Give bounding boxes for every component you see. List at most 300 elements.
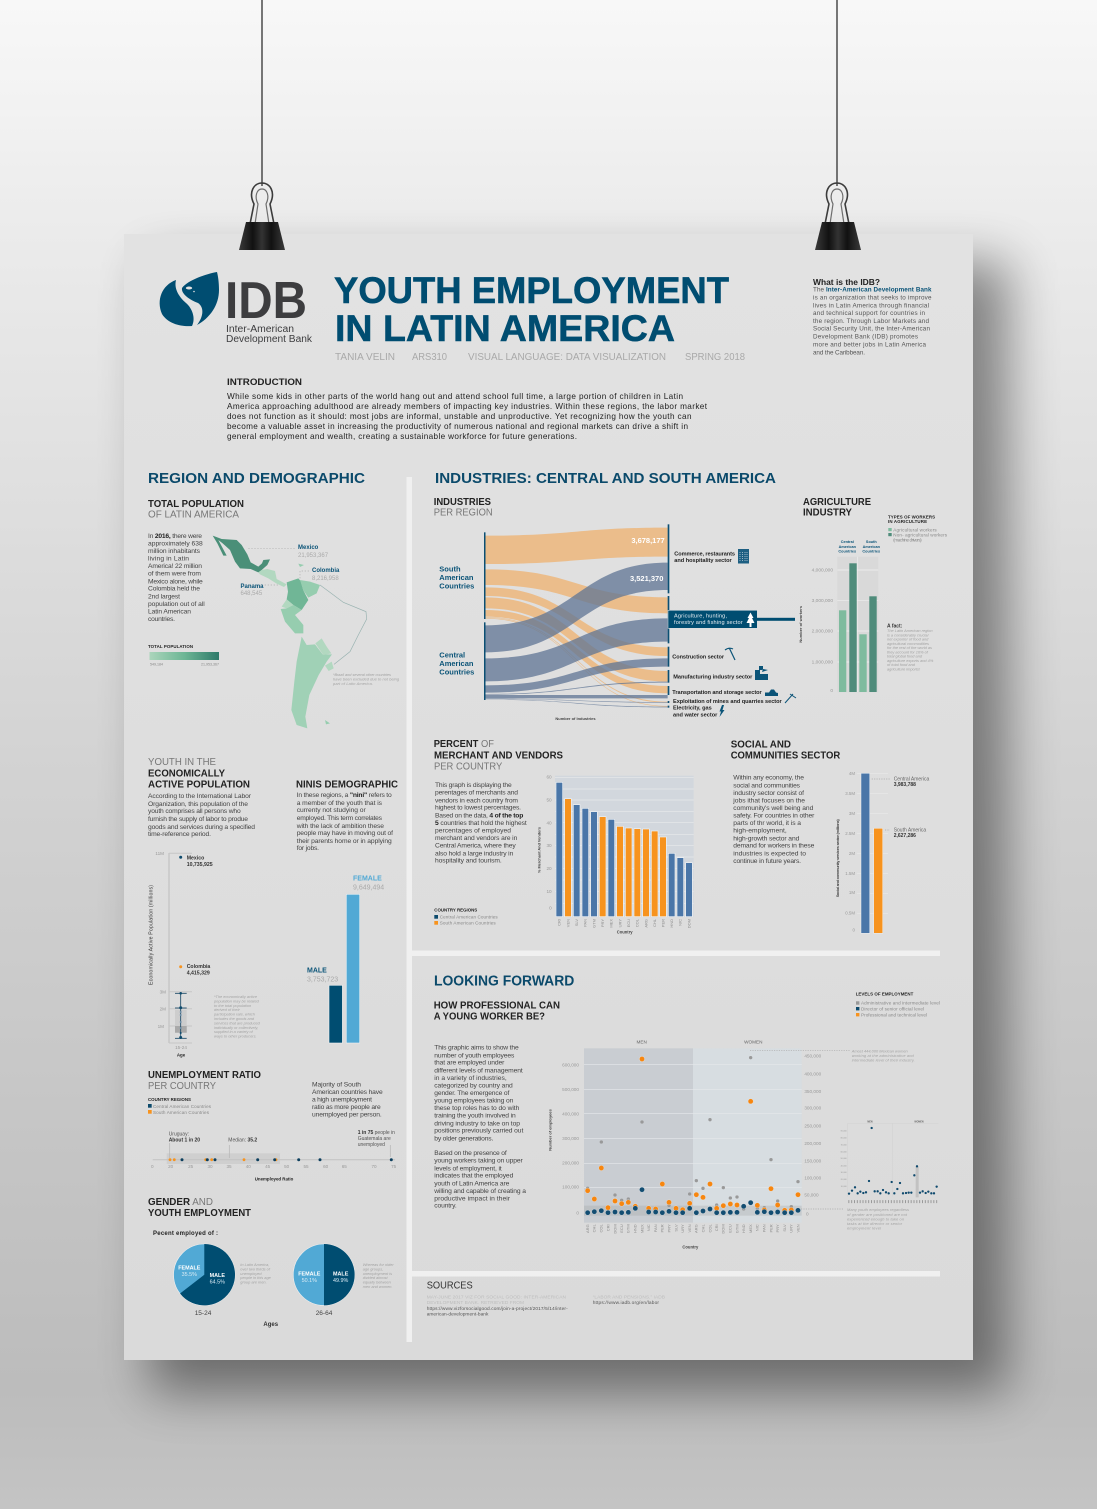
note: younger group [239, 1262, 272, 1285]
chart: unemployment strip plot [151, 1130, 397, 1182]
callout: bottom leader line and note: experienced enough to take on [847, 1216, 904, 1222]
country labels: SLV [673, 1224, 678, 1232]
text block: In these regions, a "nini" refers to [297, 792, 392, 799]
country labels: CRI [714, 1224, 719, 1231]
legend: population scale: 549,184 [150, 662, 163, 666]
scatter plot: employees by level and gender: 400,000 [562, 1111, 579, 1116]
note: older group: equally between [363, 1280, 391, 1285]
sector: electricity: Electricity, gas [673, 706, 712, 712]
chart: active population box plot [148, 851, 213, 1058]
panel: percent of merchant and vendors [434, 739, 694, 934]
text block: indicates that the employed [434, 1173, 514, 1180]
chart note: *The economically active [214, 994, 258, 999]
country labels: DOM [721, 1224, 726, 1234]
legend: COUNTRY REGIONS [434, 908, 477, 913]
source one: DEVELOPMENT BANK. RETRIEVED FROM [427, 1300, 524, 1306]
bar chart: merchants and vendors: PER [660, 919, 665, 927]
heading: PER COUNTRY [434, 761, 503, 772]
text block: introduction: general employment and wealth, creating a sustainable workforce for future generations. [227, 432, 577, 441]
text block: driving industry to take on top [434, 1120, 520, 1127]
note: younger group: In Latin America, [240, 1262, 269, 1267]
subheading: HOW PROFESSIONAL CAN [434, 1000, 560, 1011]
country labels: COL [707, 1224, 712, 1233]
heading [434, 497, 493, 518]
heading: TOTAL POPULATION [148, 499, 244, 510]
text block: their parents home or in applying [297, 838, 392, 845]
note: a fact: agricultural commodities [887, 641, 929, 646]
legend: levels of employment: Professional and technical level [861, 1012, 927, 1017]
scatter plot: employees by level and gender: WOMEN [744, 1040, 763, 1045]
text block: This graph is displaying the [435, 782, 512, 789]
text block: goods and services during a specified [148, 824, 255, 831]
text block: what is the IDB: is an organization that seeks to improve [813, 294, 932, 302]
bar chart: agriculture workers: 1,000,000 [812, 659, 833, 665]
legend: Agricultural workers [893, 527, 937, 532]
heading: MERCHANT AND VENDORS [434, 750, 563, 761]
heading [148, 499, 244, 520]
chart: active population box plot: Mexico [187, 856, 204, 862]
country labels: COL [599, 1224, 604, 1233]
text block: jobs ithat focuses on the [732, 797, 805, 804]
country labels: PAN [653, 1224, 658, 1232]
panel: youth in the economically active population [148, 757, 261, 1058]
text block: furnish the supply of labor to produe [148, 816, 248, 823]
chart: unemployment strip plot: 1 in 75 people in [358, 1130, 395, 1136]
text block: a high unemployment [312, 1097, 372, 1104]
icon: factory [755, 666, 768, 680]
small multiple: director level scatter: WOMEN [914, 1122, 924, 1124]
bar chart: ninis by gender: 9,649,494 [353, 884, 384, 892]
text block: what is the IDB: The Inter-American Development Bank [813, 286, 932, 294]
icon: pickaxe [725, 648, 735, 660]
axis label: Number of Industries [555, 716, 596, 721]
text block: Within any economy, the [733, 775, 804, 782]
chart: unemployment strip plot: Guatemala are [358, 1136, 391, 1142]
country labels: ARG [585, 1224, 590, 1233]
chart note: services that are produced [214, 1020, 261, 1025]
sankey values: 3,678,177 [631, 536, 665, 545]
heading: YOUTH EMPLOYMENT [148, 1208, 251, 1219]
bar chart: social and communities: 2,627,286 [894, 833, 916, 839]
chart note: ways to other producers. [214, 1034, 257, 1039]
pie chart: ages 15-24: 15-24 [195, 1310, 212, 1317]
series: director [585, 1187, 801, 1215]
heading: PER REGION [434, 508, 493, 518]
scatter plot: employees by level and gender: 600,000 [562, 1063, 579, 1068]
callout: bottom leader line and note [801, 1207, 909, 1231]
scatter plot: employees by level and gender: 300,000 [804, 1106, 822, 1111]
country labels: CHL [700, 1224, 705, 1232]
text block [312, 1081, 383, 1119]
byline: SPRING 2018 [685, 351, 745, 363]
text block: social and communities [733, 782, 801, 789]
callout: top leader line and note: intermediate level of their industry. [852, 1058, 915, 1063]
bar chart: agriculture workers: 3,000,000 [812, 598, 833, 604]
note: older group: age groups, [363, 1266, 383, 1271]
text block [148, 793, 255, 838]
text block: community's well being and [733, 805, 814, 812]
legend: (machine drivers) [893, 538, 922, 542]
small multiple: director level scatter: 50,000 [841, 1158, 848, 1160]
text block: what is the IDB: and technical support for countries in [813, 310, 925, 317]
bar chart: merchants and vendors: PRY [600, 919, 605, 927]
legend: levels of employment: Director of senior official level [861, 1006, 924, 1011]
country labels: ARG [694, 1224, 699, 1233]
bar chart: social and communities: Central America [894, 776, 929, 782]
small multiple: director level scatter: 30,000 [841, 1172, 848, 1174]
country labels: ECU [728, 1224, 733, 1233]
small multiple: director level scatter: 10,000 [841, 1186, 848, 1188]
text block: living in Latin [148, 556, 189, 563]
bar chart: merchants and vendors: SLV [574, 919, 579, 926]
bar chart: social and communities: Social and community services sector (millions) [835, 819, 840, 897]
IDB logo: Inter-American [226, 324, 294, 335]
subheading [434, 1000, 560, 1022]
note: older group: Whereas for older [363, 1262, 394, 1267]
text block: high-employment, [733, 828, 787, 835]
panel: social and communities sector [731, 739, 929, 933]
text block: continue in future years. [733, 858, 801, 865]
bar chart: merchants and vendors: 50 [546, 798, 552, 803]
sankey diagram [484, 524, 669, 708]
title: IN LATIN AMERICA [335, 308, 675, 349]
bar chart: merchants and vendors: NIC [678, 919, 683, 926]
text block: introduction: America approaching adulthood are already members of impacting key industries. Within these regions, the labor market [227, 402, 708, 411]
panel: looking forward [433, 974, 940, 1249]
bar chart: social and communities: 3M [849, 811, 855, 816]
text block: currenty not studying or [297, 807, 366, 814]
sector: mines: Exploitation of mines and quarries sector [673, 699, 783, 705]
subheading: A YOUNG WORKER BE? [434, 1011, 545, 1022]
legend: Non- agricultural workers [893, 532, 948, 537]
chart: unemployment strip plot: 45 [265, 1164, 271, 1169]
column headers: Countries [838, 550, 856, 554]
chart: active population box plot: 3M [160, 990, 166, 994]
bar chart: agriculture workers: 2,000,000 [812, 629, 833, 635]
text block: unemployed per person. [312, 1112, 382, 1119]
heading: industries: INDUSTRIES: CENTRAL AND SOUTH AMERICA [435, 471, 777, 487]
note: a fact: agriculture imports! [887, 666, 921, 671]
text block: what is the IDB: Social Security Unit, the Inter-American [813, 326, 930, 332]
bar chart: merchants and vendors: COL [635, 918, 640, 927]
country labels: PER [660, 1224, 665, 1233]
scatter plot: employees by level and gender: 250,000 [804, 1123, 822, 1128]
text block: America! 22 million [148, 563, 202, 570]
axis label: ages: Ages [263, 1322, 279, 1328]
note: older group: unemployment is [363, 1271, 392, 1276]
sector: commerce: and hospitality sector [674, 558, 733, 564]
chart: unemployment strip plot: 55 [303, 1164, 309, 1169]
bar chart: merchants and vendors: 60 [546, 775, 552, 780]
chart note: population may be related [213, 998, 260, 1003]
chart: unemployment strip plot: About 1 in 20 [169, 1138, 200, 1144]
sector: construction: Construction sector [672, 654, 725, 660]
country labels: URY [789, 1224, 794, 1233]
text block: with the lack of ambition these [296, 823, 384, 830]
small multiple: director level scatter: 90,000 [841, 1130, 848, 1132]
text block: industry sector consist of [733, 790, 804, 797]
scatter plot: employees by level and gender: Country [682, 1244, 699, 1249]
pie chart: ages 26-64: MALE [333, 1272, 349, 1278]
bar chart: social and communities: 3,983,788 [894, 782, 916, 788]
source two: “LABOR AND PENSIONS.” IADB [593, 1294, 665, 1300]
note: a fact: is a considerably crucial [887, 632, 928, 637]
note: younger group: unemployed [240, 1271, 262, 1276]
legend: levels of employment: Administrative and intermediate level [861, 1000, 940, 1006]
map footnote [332, 672, 400, 686]
note: a fact [887, 624, 934, 671]
text block [148, 533, 205, 623]
IDB logo: Development Bank [226, 334, 313, 345]
scatter plot: employees by level and gender: 400,000 [804, 1072, 822, 1077]
chart note: participation rate, which [213, 1012, 255, 1017]
legend: COUNTRY REGIONS [148, 1097, 191, 1102]
bar chart: social and communities: 2.5M [845, 831, 855, 836]
IDB logo [160, 272, 313, 345]
chart: unemployment strip plot: 60 [323, 1164, 329, 1169]
country labels: PAN [762, 1224, 767, 1232]
text block: vendors in each country from [435, 797, 518, 804]
heading: SOCIAL AND [731, 739, 791, 750]
text block: in a variety of industries, [434, 1075, 507, 1082]
callout: top leader line and note [750, 1048, 915, 1063]
legend: Central American Countries [440, 915, 498, 920]
source one: MAY-JUNE 2017 VIZ FOR SOCIAL GOOD: INTER-AMERICAN [427, 1294, 567, 1300]
legend [434, 908, 498, 926]
heading: LOOKING FORWARD [434, 974, 574, 990]
source one: american-development-bank [427, 1312, 489, 1318]
heading: NINIS DEMOGRAPHIC [296, 780, 398, 790]
text block [296, 792, 393, 852]
chart: active population box plot: 10,735,925 [187, 862, 213, 868]
note: younger group: people in this age [239, 1275, 272, 1280]
chart: unemployment strip plot: 25 [188, 1164, 194, 1169]
text block: what is the IDB: and the Caribbean. [813, 350, 865, 356]
text block: ratio as more people are [312, 1104, 381, 1111]
source one [427, 1294, 568, 1318]
icon: left binder clip [239, 183, 285, 250]
IDB logo: IDB [225, 272, 307, 330]
text block: for jobs. [297, 845, 319, 852]
text block: percentages of employed [435, 827, 511, 834]
heading: OF LATIN AMERICA [148, 510, 239, 520]
chart: active population box plot: Colombia [187, 964, 210, 970]
sector: mines [673, 694, 796, 705]
pie chart: ages 15-24 [174, 1244, 235, 1317]
sector: manufacturing: Manufacturing industry sector [673, 674, 753, 680]
region labels: Central [439, 651, 465, 660]
map footnote: have been excluded due to not being [333, 676, 400, 682]
panel: ninis demographic [296, 780, 398, 1043]
text block: willing and capable of creating a [433, 1188, 526, 1195]
scatter plot: employees by level and gender: 300,000 [562, 1136, 579, 1141]
bar chart: merchants and vendors: 40 [546, 820, 552, 825]
chart: unemployment strip plot: Unemployed Ratio [255, 1176, 294, 1182]
chart note: individually or collectively, [214, 1025, 259, 1030]
chart: unemployment strip plot: unemployed [358, 1142, 385, 1148]
icon: globe [160, 272, 219, 326]
chart: active population box plot: Age [177, 1052, 186, 1058]
text block: young workers taking on upper [434, 1158, 523, 1165]
text block: safety. For countries in other [733, 813, 815, 820]
sector: electricity: and water sector [673, 712, 718, 718]
scatter plot: employees by level and gender: 450,000 [804, 1054, 822, 1059]
chart: active population box plot: 1M [158, 1024, 164, 1029]
country labels: NIC [755, 1224, 760, 1231]
country labels: PRY [666, 1224, 671, 1232]
scatter plot: employees by level and gender: 0 [576, 1210, 579, 1215]
byline: TANIA VELIN [335, 351, 395, 363]
hanging strings [262, 0, 837, 186]
country labels: VEN [795, 1224, 800, 1233]
chart: unemployment strip plot: 20 [168, 1164, 174, 1169]
scatter plot: employees by level and gender: 200,000 [562, 1161, 579, 1166]
chart note: supplied in a variety of [214, 1029, 254, 1034]
legend [148, 1097, 212, 1115]
region labels: Countries [439, 668, 474, 676]
country labels: SLV [782, 1224, 787, 1232]
text block: introduction: does not function as it should: most jobs are informal, unstable and unproductive. Yet recognizing how the youth can [227, 412, 692, 421]
map labels: Colombia [312, 568, 340, 574]
note: a fact: net exporter of food and [887, 636, 929, 642]
column headers: Countries [862, 550, 880, 554]
scatter plot: employees by level and gender: 0 [806, 1211, 809, 1216]
text block [732, 775, 815, 865]
legend: population scale: 21,953,367 [201, 662, 219, 666]
bar chart: social and communities: 4M [849, 771, 855, 776]
sector: agriculture highlight [668, 610, 795, 628]
note: a fact: The Latin American region [887, 628, 932, 633]
bar chart: agriculture workers: Number of workers [798, 606, 803, 643]
text block: number of youth employees [434, 1052, 515, 1059]
small multiple: director level scatter: 40,000 [841, 1165, 848, 1167]
callout: top leader line and note: Amost 444,000 Mexican women [851, 1048, 908, 1054]
icon: building [738, 549, 749, 564]
white column and row dividers [406, 477, 940, 1342]
region labels: American [439, 573, 474, 582]
text block: high-growth sector and [733, 835, 800, 842]
heading: PERCENT OF [434, 739, 494, 750]
heading: PER COUNTRY [148, 1081, 216, 1092]
bar chart: social and communities: 1M [849, 890, 855, 895]
text block: productive impact in their [434, 1195, 511, 1202]
scatter plot: employees by level and gender: 150,000 [804, 1158, 822, 1163]
country labels: PER [768, 1224, 773, 1233]
panel: gender and youth employment [148, 1197, 394, 1328]
text block: highest to lowest percentages. [435, 805, 521, 812]
text block: hospitality and tourism. [435, 858, 502, 865]
scatter plot: employees by level and gender: 50,000 [804, 1193, 819, 1198]
sector: electricity [673, 705, 724, 718]
country labels: NIC [646, 1224, 651, 1231]
text block: employed. This term correlates [297, 815, 383, 822]
column headers: South [866, 540, 877, 544]
icon: lightning [720, 705, 724, 717]
poster drop shadow [150, 262, 1008, 1392]
map footnote: *Brazil and several other countries [333, 672, 391, 677]
note: older group: men and women. [363, 1284, 393, 1289]
legend: Central American Countries [153, 1104, 212, 1109]
pie chart: ages 15-24: 35.5% [182, 1272, 197, 1278]
heading: region and demographic: REGION AND DEMOGRAPHIC [148, 471, 366, 487]
country labels: MEX [748, 1224, 753, 1233]
scatter plot: employees by level and gender: 200,000 [804, 1141, 822, 1146]
chart note: derived of their [214, 1007, 240, 1012]
pie chart: ages 26-64: FEMALE [298, 1272, 321, 1278]
bar chart: social and communities: South America [894, 828, 926, 834]
series: administrative [586, 1056, 800, 1212]
sankey values: 3,521,370 [630, 574, 663, 583]
sector: transportation: Transportation and storage sector [672, 690, 763, 696]
heading: ACTIVE POPULATION [148, 780, 250, 790]
bar chart: ninis by gender: 3,753,723 [307, 976, 338, 984]
bar chart: merchants and vendors: GTM [591, 919, 596, 928]
column headers: American [863, 545, 881, 549]
text block: what is the IDB: Development Bank (IDB) promotes [813, 334, 918, 340]
scatter plot: employees by level and gender: 100,000 [804, 1175, 822, 1180]
text block: these top roles has to do with [434, 1105, 520, 1112]
note: a fact: of total food and [887, 662, 916, 667]
map labels: 648,545 [240, 591, 263, 597]
region labels [439, 564, 474, 676]
chart: unemployment strip plot: Uruguay: [169, 1132, 189, 1138]
country labels: VEN [687, 1224, 692, 1233]
map: Latin America [213, 536, 367, 728]
chart: unemployment strip plot: 70 [371, 1164, 377, 1169]
legend: population scale [148, 644, 219, 666]
text block: demand for workers in these [733, 843, 815, 850]
country labels: PRY [775, 1224, 780, 1232]
scatter plot: employees by level and gender: 500,000 [562, 1087, 579, 1092]
heading [148, 1070, 261, 1092]
heading: YOUTH IN THE [148, 757, 216, 768]
scatter plot: employees by level and gender: MEN [636, 1040, 647, 1045]
bar chart: social and communities: 1.5M [845, 871, 855, 876]
text block: training the youth involved in [434, 1113, 516, 1120]
bar chart: merchants and vendors: PAN [583, 919, 588, 927]
bar chart: merchants and vendors: DOM [686, 919, 691, 928]
heading: SOURCES [427, 1281, 473, 1292]
bar chart: ninis by gender: FEMALE [353, 876, 382, 882]
heading: ECONOMICALLY [148, 768, 225, 780]
legend: IN AGRICULTURE [888, 519, 927, 524]
sector: agriculture highlight: forestry and fishing sector [674, 620, 743, 626]
chart: active population box plot: 4,415,329 [187, 970, 210, 976]
heading: INDUSTRY [803, 508, 852, 519]
heading: UNEMPLOYMENT RATIO [148, 1070, 261, 1081]
pie chart: ages 26-64: 26-64 [316, 1310, 333, 1317]
chart note: to the total population [214, 1003, 251, 1008]
small multiple: director level scatter: MEN [867, 1122, 873, 1124]
heading: GENDER AND [148, 1197, 213, 1208]
small multiple: director level scatter: 70,000 [841, 1144, 848, 1146]
source two: https://www.iadb.org/en/labor [593, 1300, 659, 1306]
small multiple: director level scatter [841, 1122, 938, 1202]
sector: commerce [674, 549, 749, 564]
column headers: Central [841, 540, 854, 544]
legend [888, 514, 948, 542]
country labels: DOM [612, 1224, 617, 1234]
text block: population out of all [148, 601, 205, 608]
legend: population scale: TOTAL POPULATION [148, 644, 193, 649]
bar chart: agriculture workers: 4,000,000 [812, 568, 833, 574]
chart: unemployment strip plot: Median: 35.2 [228, 1138, 257, 1144]
pie chart: ages 26-64: 50.1% [302, 1278, 317, 1284]
note: a fact: agriculture exports and 4% [887, 658, 934, 663]
chart: unemployment strip plot: 65 [342, 1164, 347, 1169]
text block: million inhabitants [148, 548, 201, 555]
country labels: ECU [619, 1224, 624, 1233]
